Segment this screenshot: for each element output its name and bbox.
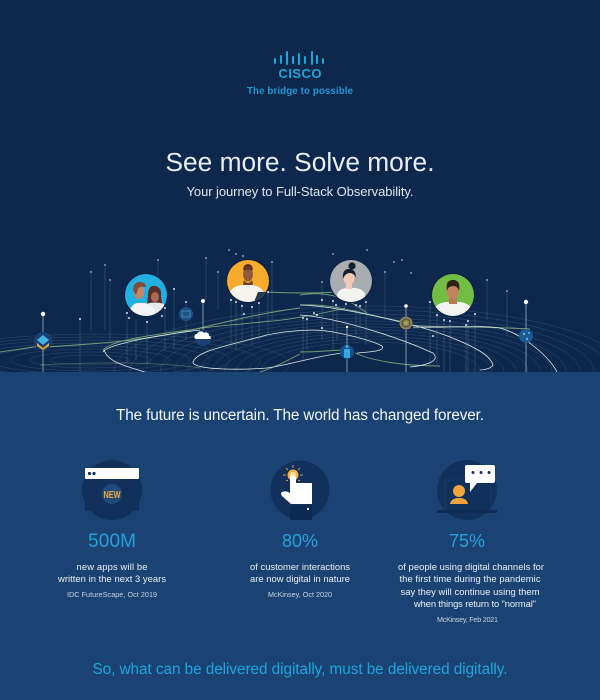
panel: stat 500M	[57, 460, 166, 599]
icon: Cisco bridge bars	[275, 52, 323, 64]
subtitle: Your journey to Full-Stack Observability.	[186, 184, 414, 199]
green flow lines	[0, 291, 530, 372]
stat number: 80%	[282, 531, 318, 551]
avatar: man on green	[431, 273, 475, 318]
icon: badge	[340, 345, 354, 359]
white flow lines	[103, 305, 557, 372]
source: McKinsey, Oct 2020	[268, 590, 332, 599]
avatar: woman on grey	[329, 259, 373, 304]
icon: target	[400, 316, 412, 330]
stat description	[250, 561, 350, 584]
tagline: The bridge to possible	[247, 86, 354, 97]
title: See more. Solve more.	[166, 147, 434, 177]
chart: network landscape illustration	[0, 248, 600, 372]
bright pin tops	[41, 299, 528, 328]
icon: hand tapping	[270, 460, 330, 520]
closing statement: So, what can be delivered digitally, must be delivered digitally.	[92, 661, 508, 678]
source: IDC FutureScape, Oct 2019	[67, 590, 157, 599]
stat description	[57, 561, 166, 584]
icon: new app window: NEW	[104, 490, 121, 501]
pin dots	[79, 288, 476, 337]
stat description: of customer interactions	[250, 561, 350, 572]
icon: cloud	[194, 330, 211, 346]
stat description: are now digital in nature	[250, 573, 350, 584]
icon: stacked layers	[34, 332, 52, 350]
stat number: 500M	[88, 531, 136, 552]
panel: dark header background	[0, 0, 600, 372]
panel: stat 75%	[398, 460, 544, 624]
icon: person on laptop with speech bubble	[437, 460, 497, 520]
heading: The future is uncertain. The world has changed forever.	[116, 407, 484, 424]
source: McKinsey, Feb 2021	[437, 615, 498, 624]
icon: faint network node	[179, 307, 193, 321]
logo wordmark: CISCO	[278, 66, 322, 81]
stat description: the first time during the pandemic	[400, 573, 541, 584]
stat description	[398, 561, 544, 609]
logo: Cisco	[247, 52, 354, 97]
avatar: two people on blue	[124, 273, 168, 317]
stat number: 75%	[449, 531, 485, 551]
strong pin lines	[43, 301, 526, 372]
avatar: man with laptop on orange	[226, 259, 270, 304]
stat description: say they will continue using them	[400, 586, 540, 597]
stat description: of people using digital channels for	[398, 561, 544, 572]
panel: stat 80%	[250, 460, 350, 599]
icon: globe node	[519, 329, 533, 343]
panel: lower statistics background	[0, 372, 600, 700]
stat description: written in the next 3 years	[57, 573, 166, 584]
stat description: new apps will be	[76, 561, 148, 572]
stat description: when things return to "normal"	[413, 598, 536, 609]
contour lines	[0, 306, 600, 372]
pin lines	[80, 258, 507, 372]
